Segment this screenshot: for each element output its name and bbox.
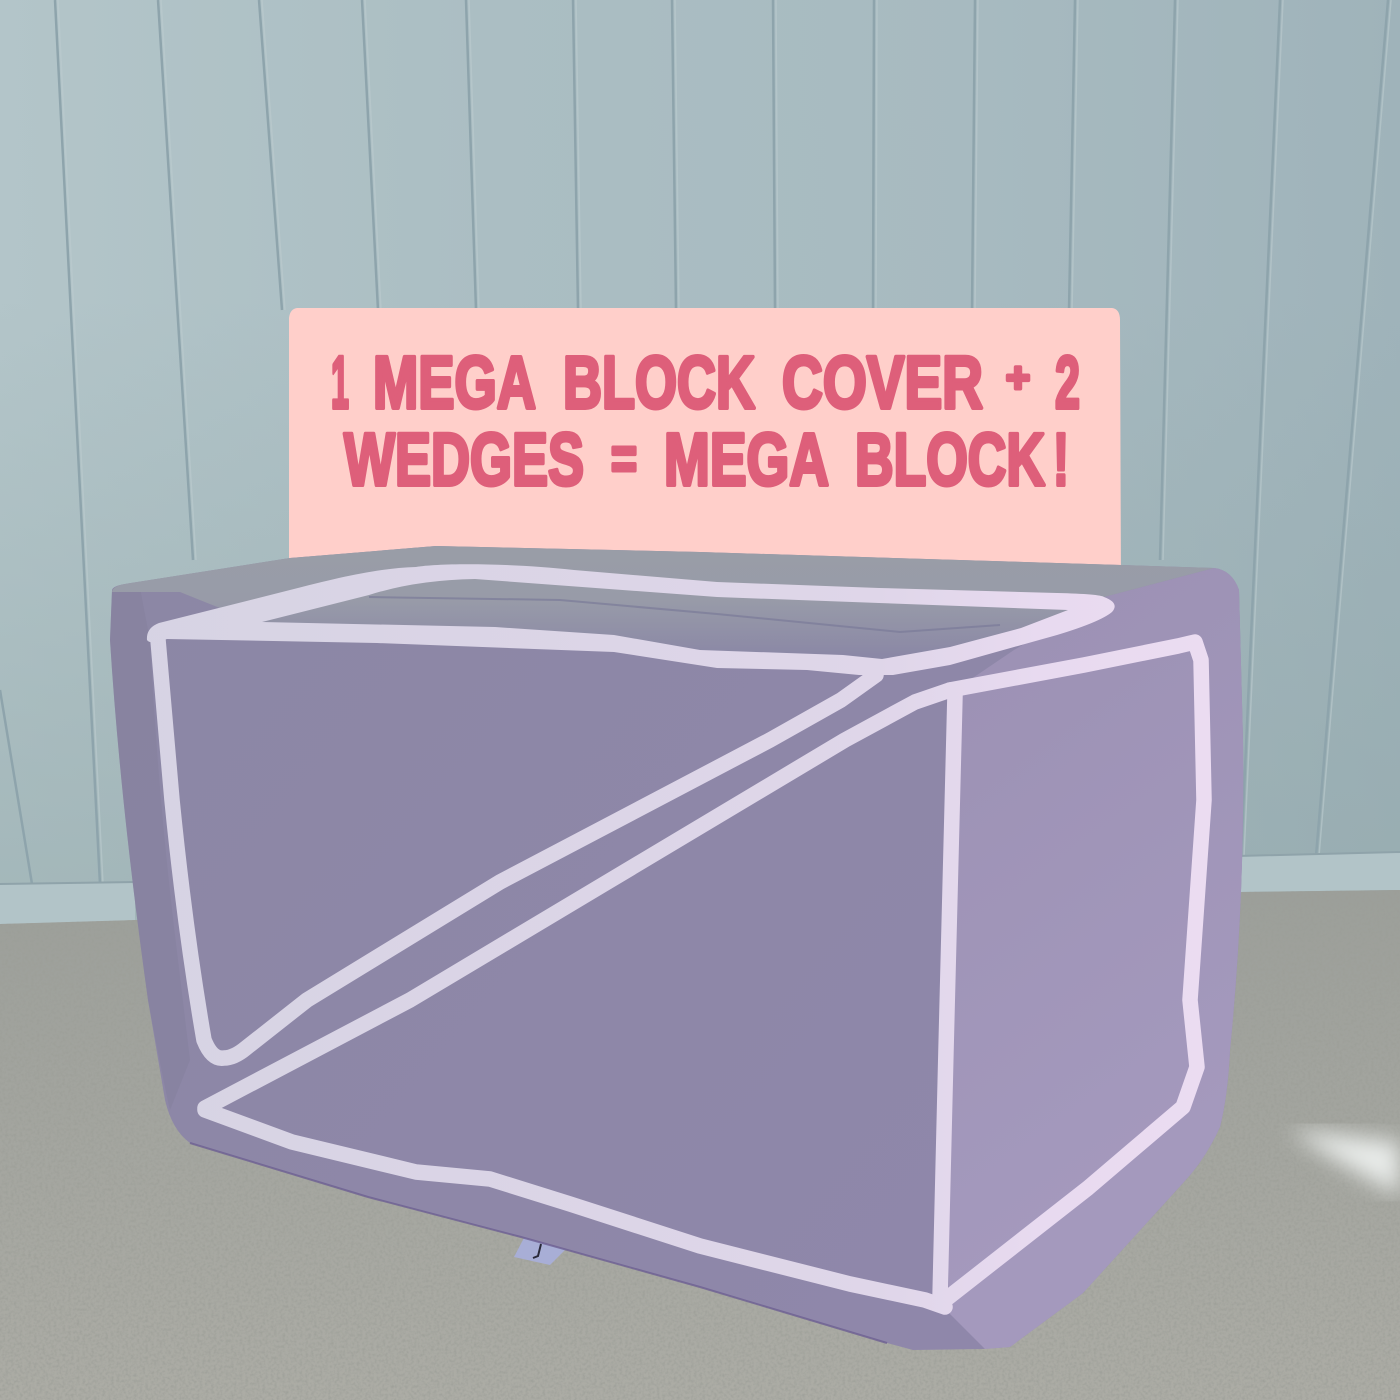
banner text: MEGA xyxy=(373,341,536,424)
lower wedge bottom edge xyxy=(205,1110,945,1307)
banner text: MEGA xyxy=(664,418,829,501)
upper wedge left and diagonal edges xyxy=(158,640,876,1058)
top face seam xyxy=(369,597,1000,632)
hand-drawn wedge outlines xyxy=(147,564,1204,1307)
banner text: 1 xyxy=(331,341,349,424)
lower wedge diagonal edge xyxy=(205,690,950,1108)
banner text: ! xyxy=(1053,418,1069,501)
background: carpet floor xyxy=(0,890,1400,1400)
vertical corner edge xyxy=(940,695,955,1298)
banner: pink label xyxy=(289,308,1121,590)
block left edge xyxy=(110,588,190,1110)
banner text: 2 xyxy=(1055,341,1080,424)
sunlight patch xyxy=(1290,1130,1400,1195)
background: panelled wall xyxy=(0,0,1400,930)
banner text: BLOCK xyxy=(855,418,1045,501)
block bottom shadow edge xyxy=(190,1143,887,1343)
purple mega block xyxy=(110,546,1243,1350)
top face outline xyxy=(147,564,1115,675)
block side face xyxy=(948,568,1243,1349)
lower wedge right-face outline xyxy=(945,642,1204,1300)
banner text: WEDGES xyxy=(344,418,584,501)
block top face xyxy=(112,546,1214,664)
banner text: + xyxy=(1006,354,1030,401)
fabric tag xyxy=(514,1236,569,1265)
banner text xyxy=(331,341,1080,501)
banner text: = xyxy=(611,425,637,492)
block front face xyxy=(110,546,1243,1350)
banner text: BLOCK xyxy=(563,341,755,424)
banner text: COVER xyxy=(782,341,983,424)
